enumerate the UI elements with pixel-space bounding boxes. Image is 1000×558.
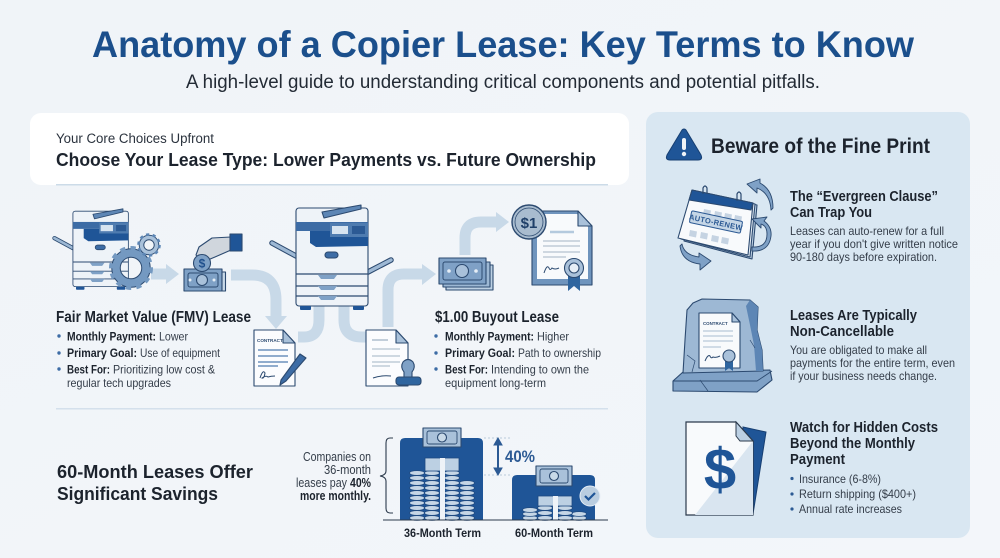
arrow head: cash to certificate: [496, 212, 509, 232]
bar label: 36-month term: 36-Month Term: [404, 526, 481, 540]
subtitle: A high-level guide to understanding critical components and potential pitfalls.: [186, 72, 820, 93]
list: hidden costs: Return shipping ($400+): [799, 487, 916, 501]
buyout best for: [445, 362, 589, 390]
heading: non-cancellable: [790, 308, 917, 340]
bar chart: lease term comparison: [383, 428, 608, 540]
badge: auto-renew: AUTO-RENEW: [688, 212, 744, 233]
callout: 40 percent more monthly: more monthly.: [300, 489, 371, 503]
FMV monthly payment: Monthly Payment:: [67, 330, 156, 344]
FMV best for: Prioritizing low cost &: [113, 362, 215, 376]
panel: beware of the fine print: [646, 112, 970, 538]
arrow head: copier to money: [166, 264, 179, 284]
arrow: contract to copier: [298, 305, 319, 337]
icon: banknote on 60-month bar: [536, 466, 572, 486]
arrow head: money to contract: [265, 316, 287, 329]
buyout primary goal: [445, 346, 601, 360]
arrow: copier to money: [151, 268, 168, 280]
FMV primary goal: [67, 346, 221, 360]
icon: contract with pen: [254, 330, 306, 386]
difference arrow: 40 percent: [484, 438, 535, 475]
card eyebrow: Your Core Choices Upfront: [56, 131, 214, 146]
icon: gears: [111, 234, 160, 288]
icon: central copier: [272, 205, 391, 310]
heading: evergreen clause: [790, 189, 938, 221]
heading: FMV lease: Fair Market Value (FMV) Lease: [56, 309, 251, 326]
body: evergreen clause: Leases can auto-renew for a full: [790, 224, 944, 238]
icon: warning triangle: [666, 129, 702, 160]
buyout best for: Intending to own the: [491, 362, 589, 376]
list: hidden costs: [790, 472, 916, 516]
icon: contract in stone: [673, 299, 772, 392]
heading: hidden costs: [790, 420, 938, 468]
icon: check badge: [580, 486, 600, 506]
list: hidden costs: Annual rate increases: [799, 502, 902, 516]
panel heading: Beware of the Fine Print: [711, 135, 930, 158]
heading: non-cancellable: Non-Cancellable: [790, 324, 894, 340]
FMV best for: Best For:: [67, 362, 110, 376]
heading: hidden costs: Beyond the Monthly: [790, 436, 915, 452]
FMV monthly payment: Lower: [159, 330, 188, 344]
body: non-cancellable: You are obligated to make all: [790, 343, 927, 357]
title: Anatomy of a Copier Lease: Key Terms to Know: [92, 24, 914, 65]
callout: 40 percent more monthly: Companies on: [303, 450, 371, 464]
buyout primary goal: Primary Goal:: [445, 346, 515, 360]
icon: small copier: [54, 209, 128, 290]
callout: 40 percent more monthly: leases pay: [296, 476, 348, 490]
buyout best for: Best For:: [445, 362, 488, 376]
text block: $1 buyout lease: [434, 309, 601, 390]
chart baseline: [383, 519, 608, 521]
heading: hidden costs: Payment: [790, 452, 845, 468]
bar label: 60-month term: 60-Month Term: [515, 526, 593, 540]
icon: contract in stone: CONTRACT: [703, 321, 728, 326]
buyout best for: equipment long-term: [445, 376, 546, 390]
icon: contract with pen: CONTRACT: [257, 338, 283, 343]
icon: banknote with hand and coin: $: [199, 256, 206, 270]
heading: hidden costs: Watch for Hidden Costs: [790, 420, 938, 436]
icon: renewal arrows: [680, 179, 773, 270]
heading: buyout lease: $1.00 Buyout Lease: [435, 309, 559, 326]
buyout monthly payment: Monthly Payment:: [445, 330, 534, 344]
bullet markers: [434, 334, 438, 371]
heading: 60-month savings: Significant Savings: [57, 484, 218, 504]
card heading: Choose Your Lease Type: Lower Payments vs. Future Ownership: [56, 149, 596, 170]
heading: evergreen clause: The “Evergreen Clause”: [790, 189, 938, 205]
callout: 40 percent more monthly: [296, 450, 371, 503]
heading: non-cancellable: Leases Are Typically: [790, 308, 917, 324]
heading: 60-month savings: [57, 462, 253, 504]
callout: 40 percent more monthly: 40%: [350, 476, 371, 490]
flow arrows between lease stages: [151, 212, 509, 337]
bullet markers: [57, 334, 61, 371]
buyout primary goal: Path to ownership: [518, 346, 601, 360]
heading: 60-month savings: 60-Month Leases Offer: [57, 462, 253, 482]
body: evergreen clause: 90-180 days before expiration.: [790, 250, 937, 264]
brace: [380, 438, 393, 513]
arrow: cash to certificate: [465, 222, 498, 255]
FMV primary goal: Primary Goal:: [67, 346, 137, 360]
arrow: copier to stamped document: [344, 305, 366, 337]
text block: FMV lease: [56, 309, 251, 390]
body: non-cancellable: if your business needs change.: [790, 369, 937, 383]
buyout monthly payment: Higher: [537, 330, 569, 344]
icon: hidden cost document: [686, 422, 766, 515]
icon: auto-renew calendar: [678, 186, 757, 259]
arrow: document to cash: [388, 274, 424, 327]
icon: ownership certificate with $1 coin: $1: [521, 215, 537, 232]
arrow head: document to cash: [422, 264, 436, 285]
bar: 36-month term: [400, 438, 483, 520]
icon: ownership certificate with $1 coin: [512, 205, 592, 291]
icon: stamped document: [366, 330, 421, 386]
FMV primary goal: Use of equipment: [140, 346, 221, 360]
icon: cash stack: [439, 258, 493, 290]
FMV best for: regular tech upgrades: [67, 376, 171, 390]
body: non-cancellable: payments for the entire term, even: [790, 356, 955, 370]
FMV best for: [67, 362, 215, 390]
40 percent label: 40%: [505, 447, 535, 466]
body: non-cancellable: [790, 343, 955, 383]
callout: 40 percent more monthly: 36-month: [324, 463, 371, 477]
list: hidden costs: Insurance (6-8%): [799, 472, 881, 486]
heading: evergreen clause: Can Trap You: [790, 205, 872, 221]
panel: lease type header card: [30, 113, 629, 185]
icon: banknote with hand and coin: [184, 234, 242, 291]
body: evergreen clause: [790, 224, 958, 264]
arrow: money to contract: [231, 275, 276, 318]
icon: banknote on 36-month bar: [423, 428, 461, 447]
body: evergreen clause: year if you don't give written notice: [790, 237, 958, 251]
icon: hidden cost document: $: [704, 437, 736, 502]
bar: 60-month term: [512, 475, 595, 520]
